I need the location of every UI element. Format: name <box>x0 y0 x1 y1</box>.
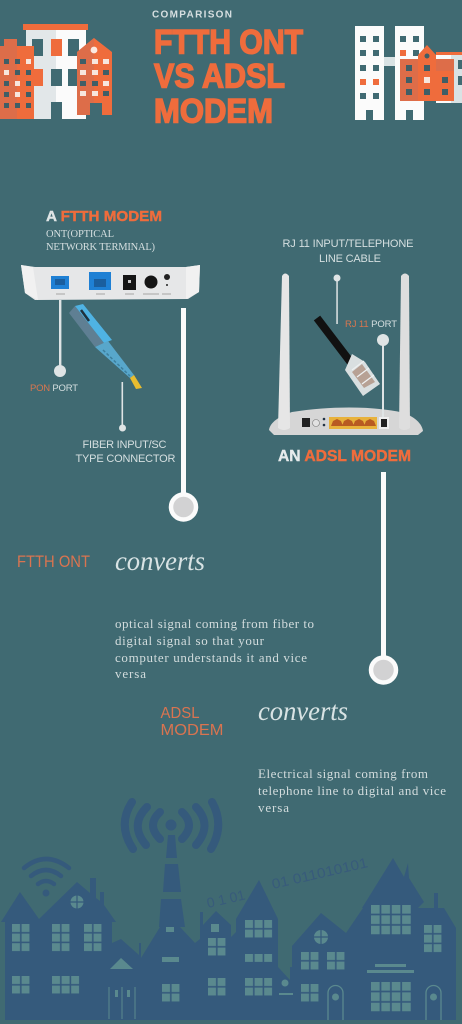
text: ADSL description: telephone line to digital and vice <box>258 783 446 798</box>
label: ADSL modem: ADSL <box>160 705 200 722</box>
text: FTTH description: computer understands it and vice <box>115 650 307 665</box>
text: FTTH description: digital signal so that your <box>115 633 265 648</box>
word: converts FTTH: converts <box>115 546 205 576</box>
connector: FTTH vertical line and node <box>171 308 196 520</box>
label: FTTH ONT: FTTH ONT <box>17 553 90 571</box>
illustration: right white towers and orange buildings <box>355 26 462 120</box>
callout: fiber input connector <box>76 382 176 465</box>
callout: fiber input connector: TYPE CONNECTOR <box>76 453 176 465</box>
illustration: town skyline with tower <box>1 835 456 1020</box>
label: ADSL modem <box>160 705 224 739</box>
title: VS ADSL <box>154 58 285 96</box>
callout: RJ11 input cable: LINE CABLE <box>319 253 381 265</box>
tower <box>159 835 185 927</box>
title <box>154 24 303 130</box>
text: FTTH description <box>115 616 314 681</box>
image: RJ11 telephone cable and plug <box>317 318 380 396</box>
icon: wifi <box>24 859 69 896</box>
text: ADSL description: versa <box>258 800 289 815</box>
text: binary digits: 01 011010101 <box>270 854 369 892</box>
icon: radio waves <box>125 802 218 849</box>
heading: a FTTH modem: A FTTH MODEM <box>46 208 162 225</box>
text: binary digits <box>205 854 369 911</box>
image: FTTH modem back panel <box>21 265 200 300</box>
callout: PON port: PON PORT <box>30 383 78 394</box>
word: converts ADSL: converts <box>258 696 348 726</box>
image: ADSL modem with antennas <box>269 274 423 435</box>
callout: fiber input connector: FIBER INPUT/SC <box>82 439 167 451</box>
callout: PON port <box>30 300 78 394</box>
text: ONT definition: ONT(OPTICAL <box>46 229 114 240</box>
connector: ADSL vertical line and node <box>371 472 396 682</box>
title: FTTH ONT <box>154 24 303 62</box>
title: MODEM <box>154 92 273 130</box>
label: comparison: COMPARISON <box>152 10 232 20</box>
text: FTTH description: optical signal coming from fiber to <box>115 616 314 631</box>
text: ADSL description: Electrical signal coming from <box>258 766 428 781</box>
label: ADSL modem: MODEM <box>160 722 224 739</box>
text: ONT definition: NETWORK TERMINAL) <box>46 242 156 253</box>
callout: RJ11 port: RJ 11 PORT <box>345 319 397 330</box>
small details <box>70 896 84 908</box>
illustration: left orange and white buildings <box>0 24 112 119</box>
house windows <box>12 905 442 1011</box>
callout: RJ11 port <box>345 319 397 417</box>
callout: RJ11 input cable: RJ 11 INPUT/TELEPHONE <box>282 238 414 250</box>
text: binary digits: 0 1 01 <box>205 887 247 911</box>
text: ONT definition <box>46 229 156 253</box>
text: FTTH description: versa <box>115 666 146 681</box>
callout: RJ11 input cable <box>282 238 414 324</box>
text: ADSL description <box>258 766 446 815</box>
silhouette of houses <box>1 858 456 1020</box>
image: SC fiber connector <box>69 304 142 389</box>
heading: an ADSL modem: AN ADSL MODEM <box>278 448 411 465</box>
